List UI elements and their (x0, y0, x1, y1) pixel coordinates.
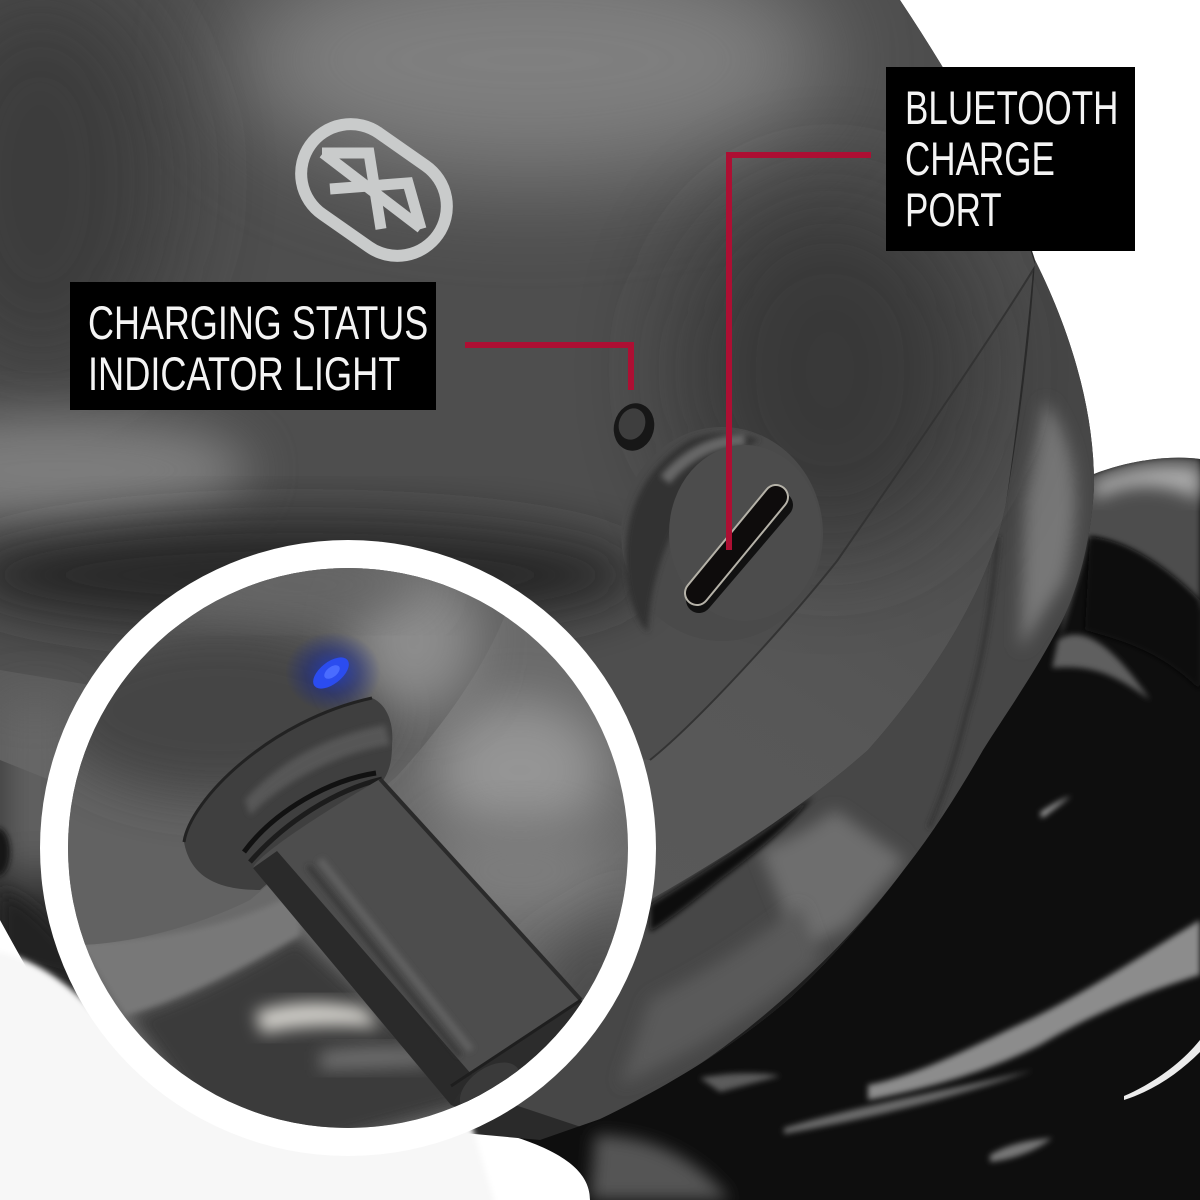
callout: charging status indicator light (70, 282, 436, 410)
inset: magnified charging view (40, 540, 656, 1156)
dome (60, 560, 520, 945)
black glint strip (650, 795, 815, 932)
rear earbud upper shell (1060, 457, 1200, 640)
callout: charging status indicator light: CHARGING STATUS (88, 296, 428, 349)
connector cable end (451, 1000, 582, 1107)
rear earbud, glossy black (518, 458, 1200, 1200)
callout leader lines (465, 155, 871, 550)
blue LED (290, 636, 377, 707)
icon: bluetooth logo (282, 105, 466, 275)
lower left shading (0, 700, 70, 880)
matte mid band (0, 270, 1033, 920)
callout: bluetooth charge port: CHARGE (905, 132, 1055, 185)
blurred background (435, 700, 605, 840)
rear earbud reflections (868, 920, 1200, 1100)
callout: bluetooth charge port (886, 67, 1135, 251)
dark lower area (128, 934, 473, 1128)
callout: bluetooth charge port: PORT (905, 183, 1002, 236)
rubber grommet (184, 698, 392, 890)
callout: charging status indicator light: INDICATOR LIGHT (88, 347, 400, 400)
USB-C connector (254, 779, 558, 1072)
curved lower dome strip (84, 902, 300, 1014)
callout: bluetooth charge port: BLUETOOTH (905, 81, 1118, 134)
glossy lower rim (517, 260, 1094, 1126)
charge port (621, 427, 823, 641)
matte upper dome (0, 0, 1035, 760)
indicator light (608, 399, 660, 455)
white floor lower left (0, 950, 500, 1200)
